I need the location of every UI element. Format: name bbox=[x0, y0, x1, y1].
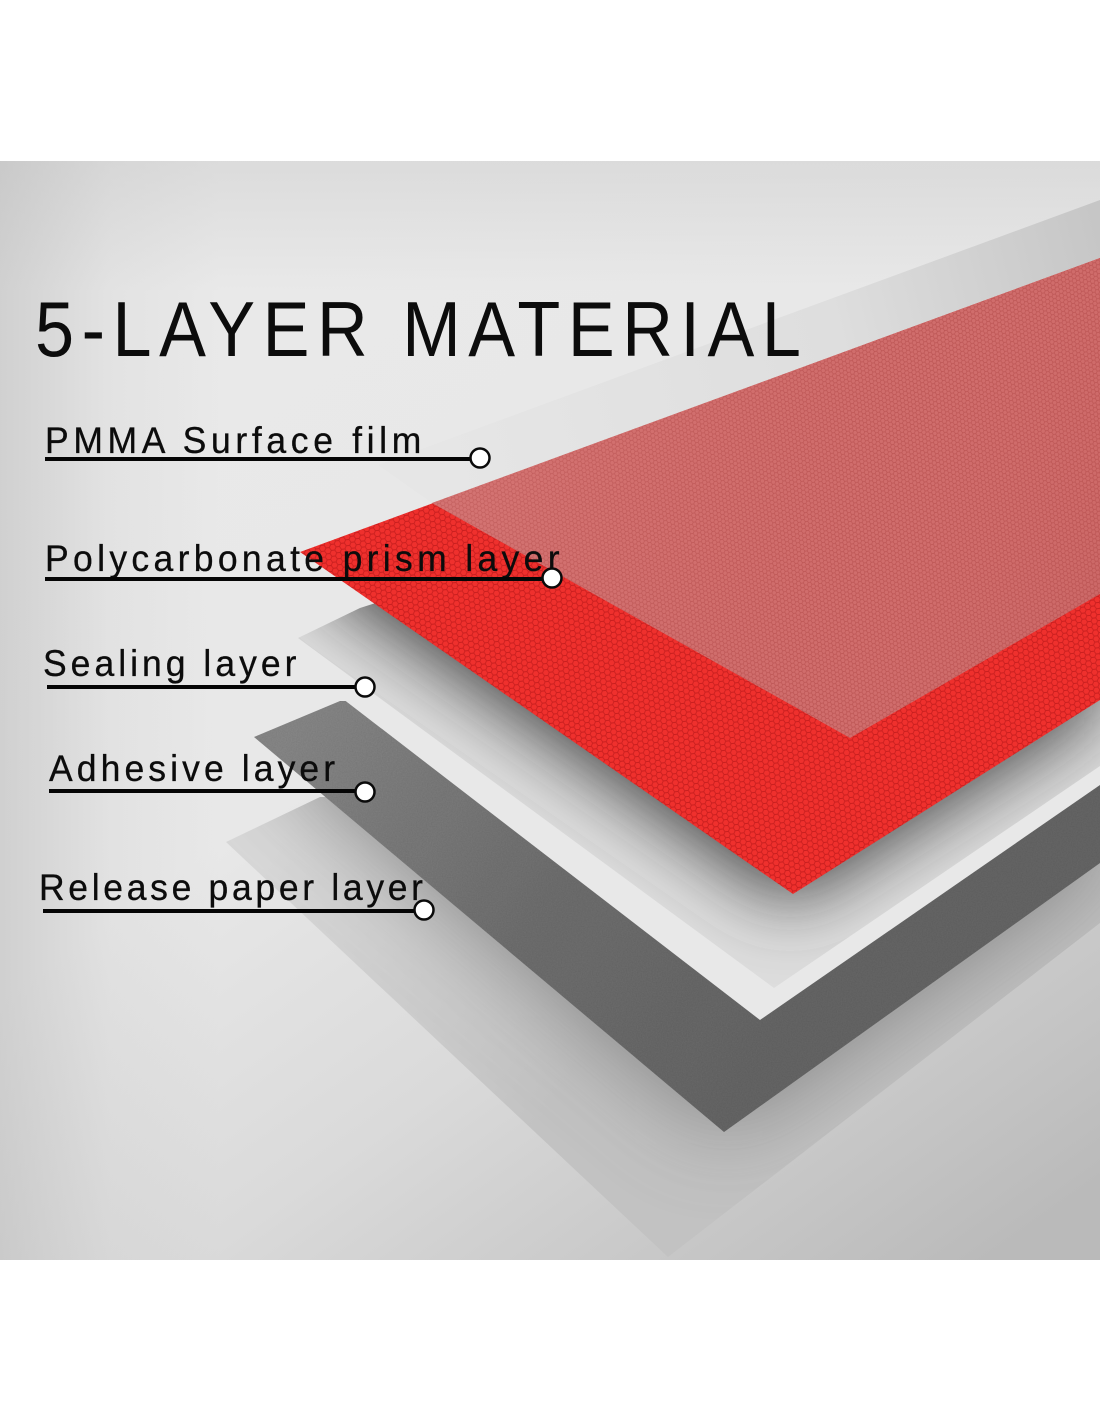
layer: PMMA surface film (translucent sheet) bbox=[432, 258, 1100, 738]
label: Release paper layer: Release paper layer bbox=[39, 866, 423, 908]
label: Polycarbonate prism layer: Polycarbonate prism layer bbox=[45, 537, 560, 579]
label: Adhesive layer: Adhesive layer bbox=[49, 747, 335, 789]
label: Adhesive layer bbox=[49, 747, 374, 802]
label: PMMA Surface film: PMMA Surface film bbox=[45, 419, 421, 461]
lower background sheet with shadow bbox=[226, 797, 1100, 1228]
panel: grey studio background bbox=[0, 161, 1100, 1260]
layer: polycarbonate prism (red sheet) bbox=[300, 258, 1100, 894]
label: Sealing layer: Sealing layer bbox=[43, 642, 296, 684]
title: 5-LAYER MATERIAL bbox=[35, 286, 801, 373]
layer: release paper (dark grey sheet) bbox=[254, 701, 1100, 1132]
label: Sealing layer bbox=[43, 642, 374, 696]
upper background sheet bbox=[718, 200, 1100, 390]
layer: adhesive / sealing (white sheet) bbox=[298, 604, 1100, 1020]
